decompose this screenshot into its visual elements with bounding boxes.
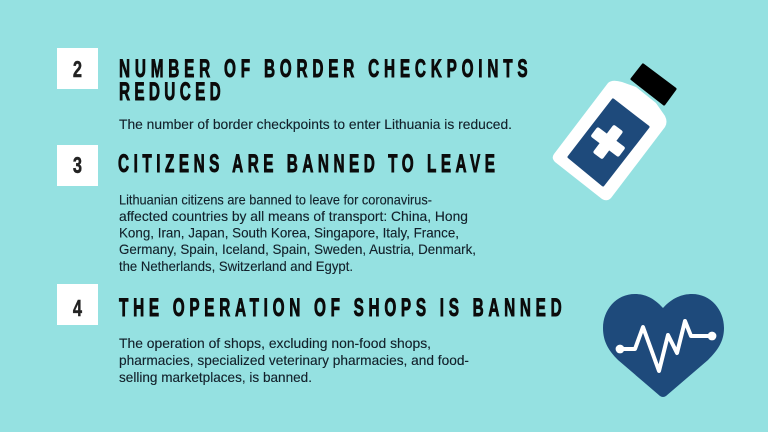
number box 3: 3 <box>73 153 82 179</box>
number box 2: 2 <box>73 57 82 83</box>
body text 4: The operation of shops, excluding non-food shops, <box>119 336 431 351</box>
number box 3 <box>57 145 98 186</box>
cross <box>583 117 633 167</box>
section 3: citizens are banned to leave <box>57 145 495 274</box>
body text 2: The number of border checkpoints to enter Lithuania is reduced. <box>119 117 512 132</box>
heading 2: REDUCED <box>119 78 221 106</box>
bottle cap <box>632 65 675 104</box>
body text 3: Kong, Iran, Japan, South Korea, Singapore, Italy, France, <box>119 226 459 240</box>
number box 4 <box>57 284 98 325</box>
body text 3 <box>119 192 476 274</box>
body text 4 <box>119 336 469 385</box>
heading 2 <box>119 55 528 106</box>
heading 4: THE OPERATION OF SHOPS IS BANNED <box>119 294 562 322</box>
heading 3: CITIZENS ARE BANNED TO LEAVE <box>118 150 495 178</box>
number box 4: 4 <box>73 296 83 322</box>
body text 3: Germany, Spain, Iceland, Spain, Sweden, Austria, Denmark, <box>119 242 476 257</box>
body text 3: Lithuanian citizens are banned to leave for coronavirus- <box>119 192 432 208</box>
heading 2: NUMBER OF BORDER CHECKPOINTS <box>119 55 528 83</box>
number box 2 <box>57 48 98 89</box>
body text 4: pharmacies, specialized veterinary pharmacies, and food- <box>119 353 469 368</box>
bottle body <box>553 81 666 200</box>
body text 3: the Netherlands, Switzerland and Egypt. <box>119 259 353 274</box>
heart <box>603 294 724 397</box>
icon: heart with pulse line <box>603 294 724 397</box>
section 2: number of border checkpoints reduced <box>57 48 528 132</box>
bottle label <box>569 100 648 185</box>
section 4: the operation of shops is banned <box>57 284 562 385</box>
body text 3: affected countries by all means of transport: China, Hong <box>119 209 468 224</box>
icon: medicine bottle with cross <box>553 65 675 200</box>
pulse line <box>616 321 716 371</box>
body text 4: selling marketplaces, is banned. <box>119 370 312 385</box>
